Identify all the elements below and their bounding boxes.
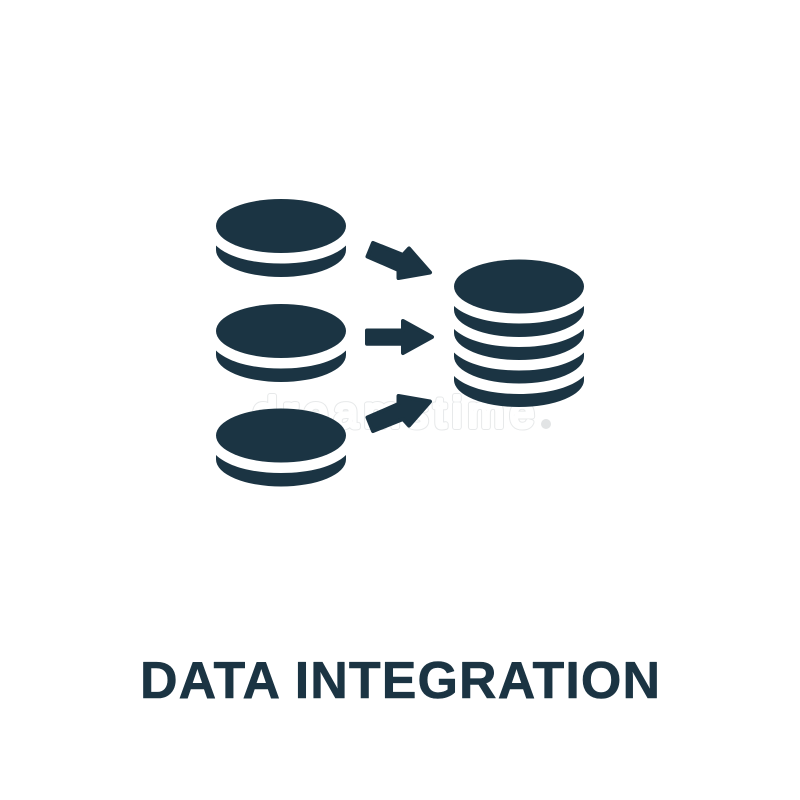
arrow: top source to target (368, 243, 430, 278)
arrow: bottom source to target (368, 396, 430, 431)
watermark: dreamstime (253, 389, 534, 437)
title: DATA INTEGRATION (140, 652, 660, 710)
icon: integrated database stack (454, 260, 584, 407)
watermark: dreamstime (253, 389, 534, 437)
icon: source database middle (216, 304, 346, 382)
icon: source database bottom (216, 408, 346, 486)
icon: source database top (216, 199, 346, 277)
arrow: middle source to target (367, 321, 432, 353)
